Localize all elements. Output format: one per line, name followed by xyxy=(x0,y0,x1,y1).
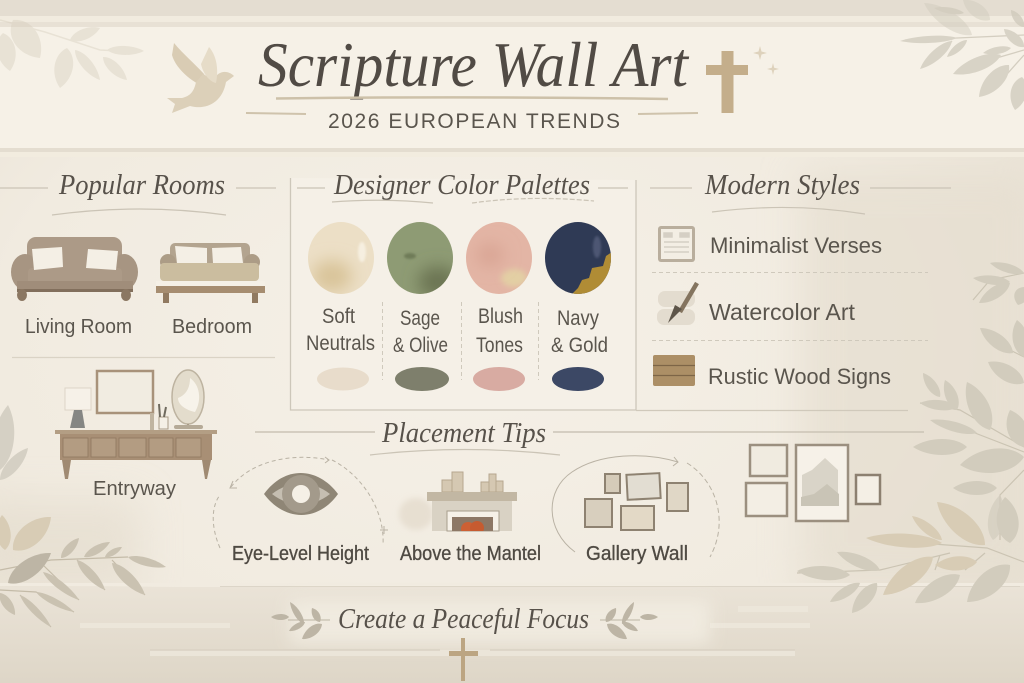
icon: framed art group xyxy=(746,445,880,521)
label: bedroom: Bedroom xyxy=(172,316,252,338)
label: sage and olive: & Olive xyxy=(393,334,448,357)
heading rules xyxy=(0,188,276,215)
panel: modern styles xyxy=(650,170,951,389)
label: blush tones xyxy=(476,305,523,357)
panel: header xyxy=(167,29,779,133)
rule under columns xyxy=(636,410,908,412)
label: minimalist verses: Minimalist Verses xyxy=(710,233,882,258)
swatch: blush tones xyxy=(466,222,532,294)
footer text: Create a Peaceful Focus xyxy=(338,604,589,635)
label: blush tones: Blush xyxy=(478,305,523,328)
label: blush tones: Tones xyxy=(476,334,523,357)
label: navy and gold xyxy=(551,307,608,357)
swatch: soft neutrals xyxy=(308,222,374,294)
icon: sofa xyxy=(11,237,138,301)
label: gallery wall: Gallery Wall xyxy=(586,543,688,565)
icon: minimalist frame xyxy=(658,226,695,262)
sprig right xyxy=(600,600,658,643)
icon: watercolor brush xyxy=(657,283,697,325)
decorative leaves: top left xyxy=(0,13,144,90)
decorative leaves: right branch tan leaves xyxy=(866,494,992,603)
heading: popular rooms: Popular Rooms xyxy=(58,170,225,201)
icon: wood sign xyxy=(653,355,695,386)
heading: modern styles: Modern Styles xyxy=(704,170,860,201)
swatch: navy and gold xyxy=(545,222,612,296)
icon: dove xyxy=(167,43,234,113)
label: living room: Living Room xyxy=(25,316,132,338)
title underline xyxy=(276,97,668,99)
label: soft neutrals xyxy=(306,305,375,355)
subtitle side rules xyxy=(246,113,698,114)
arrow: gallery arcs xyxy=(552,456,719,557)
sprig left xyxy=(271,600,330,643)
label: above the mantel: Above the Mantel xyxy=(400,543,541,565)
label: eye-level height: Eye-Level Height xyxy=(232,543,369,565)
icon: eye xyxy=(264,473,338,515)
decorative leaves: bottom left branch xyxy=(0,509,167,630)
heading rules xyxy=(650,188,951,214)
label: watercolor art: Watercolor Art xyxy=(709,299,856,325)
arrow: eye level arcs xyxy=(213,457,388,548)
column separators xyxy=(382,302,538,380)
divider xyxy=(652,272,928,340)
label: rustic wood signs: Rustic Wood Signs xyxy=(708,364,891,389)
label: sage and olive xyxy=(393,307,448,357)
panel: footer xyxy=(150,600,795,681)
subtitle: 2026 EUROPEAN TRENDS xyxy=(328,110,620,133)
icon: bed xyxy=(156,243,265,303)
label: navy and gold: Navy xyxy=(557,307,599,330)
icon: footer cross xyxy=(449,638,478,681)
decorative leaves: top right xyxy=(900,0,1024,112)
panel frame xyxy=(290,178,636,410)
divider xyxy=(12,356,275,358)
label: entryway: Entryway xyxy=(93,478,176,500)
heading: placement tips: Placement Tips xyxy=(381,418,546,449)
icon: gallery wall xyxy=(585,473,688,530)
decorative leaves: left edge grey xyxy=(0,404,33,484)
decorative leaves: right side branch xyxy=(796,259,1024,618)
icon: mantel xyxy=(399,472,517,536)
panel: designer color palettes xyxy=(290,170,636,410)
heading dashed rule xyxy=(472,198,594,203)
heading: designer color palettes: Designer Color Palettes xyxy=(333,170,590,201)
icon: sparkles xyxy=(753,46,779,75)
icon: cross xyxy=(706,51,748,113)
title: Scripture Wall Art xyxy=(258,29,690,100)
panel: popular rooms xyxy=(0,170,276,500)
icon: entryway console xyxy=(55,370,217,479)
label: sage and olive: Sage xyxy=(400,307,440,330)
paint strokes xyxy=(317,367,604,391)
heading rules xyxy=(297,188,628,203)
footer rule xyxy=(150,649,795,651)
label: soft neutrals: Neutrals xyxy=(306,332,375,355)
label: navy and gold: & Gold xyxy=(551,334,608,357)
panel: placement tips xyxy=(213,410,924,565)
label: soft neutrals: Soft xyxy=(322,305,355,328)
swatch: sage and olive xyxy=(387,222,453,294)
heading rules xyxy=(255,431,924,433)
